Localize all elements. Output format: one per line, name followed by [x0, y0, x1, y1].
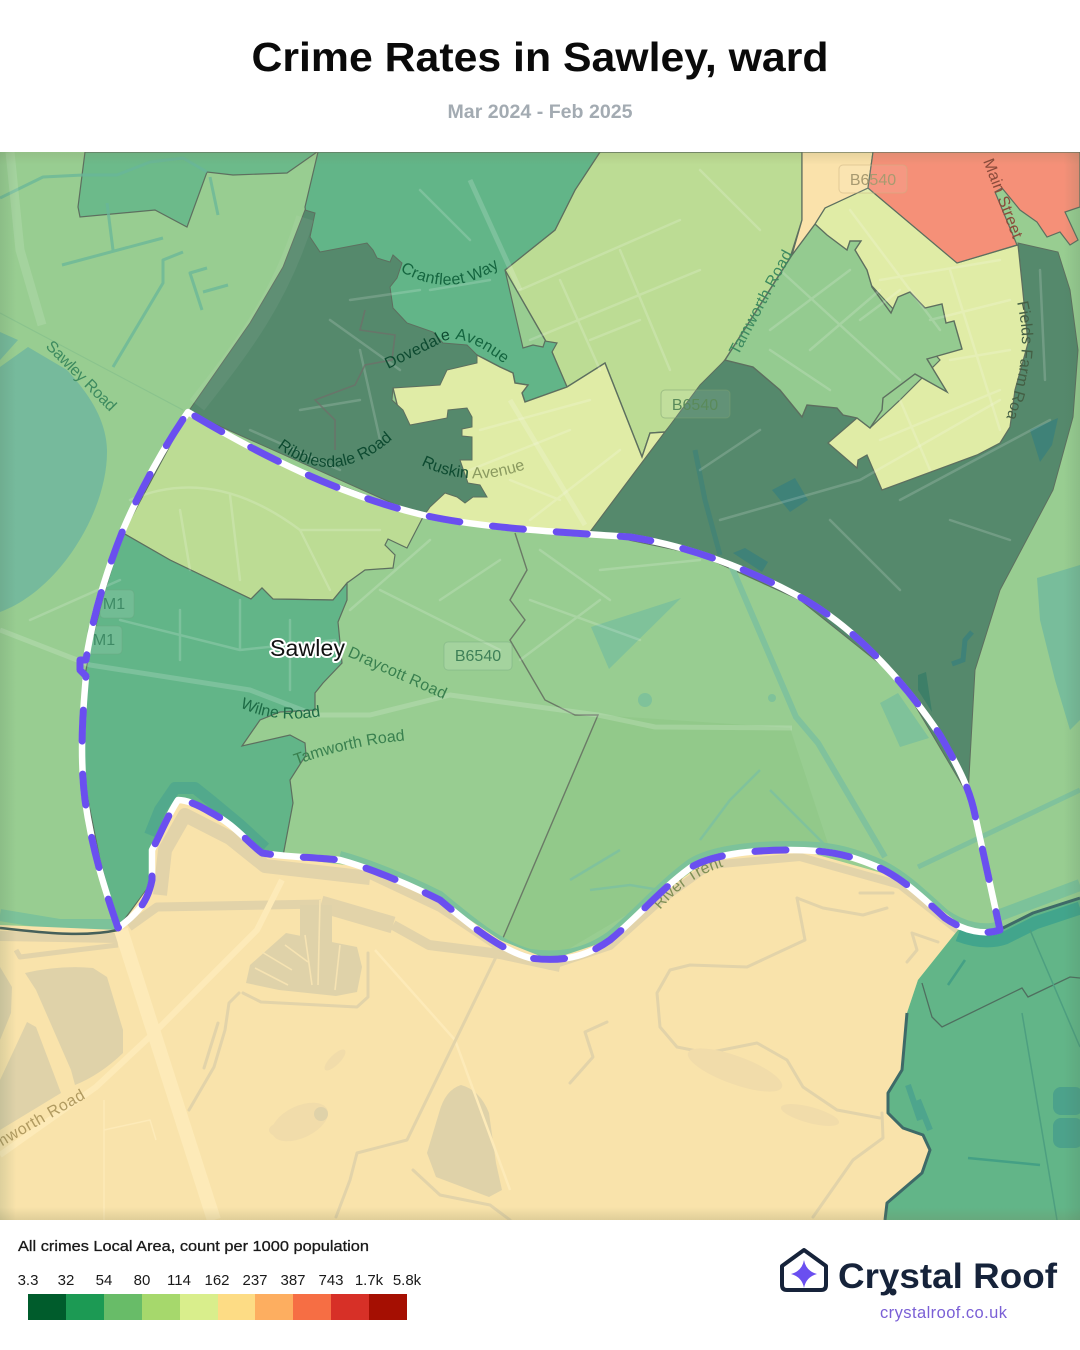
map area: south-east details: [908, 930, 1080, 1220]
legend colour scale: [28, 1294, 407, 1320]
map labels: motorway and road shields: B6540: [850, 172, 896, 189]
map labels: street names: Dovedale Avenue: [384, 329, 508, 368]
legend tick labels: [18, 1272, 422, 1289]
map labels: street names: Draycott Road: [345, 644, 449, 703]
legend tick labels: 80: [134, 1272, 150, 1289]
map area: small western pond: [0, 332, 18, 360]
legend tick labels: 32: [58, 1272, 74, 1289]
map labels: motorway and road shields: [88, 165, 907, 670]
icon: house with star: [782, 1250, 826, 1290]
map area: top sand zone: [792, 152, 873, 255]
map area: north-west darker patch: [78, 152, 317, 227]
map area: ward north-west yellow-green part: [123, 412, 423, 600]
legend: [18, 1238, 422, 1320]
ward boundary: [80, 412, 1000, 959]
map labels: street names: Tamworth Road: [727, 247, 796, 358]
map labels: street names: Main Street: [979, 156, 1025, 241]
legend tick labels: 3.3: [18, 1272, 38, 1289]
map area: marina pontoons: [255, 900, 340, 990]
map area: central pale zone: [393, 355, 665, 532]
legend tick labels: 54: [96, 1272, 112, 1289]
map labels: street names: Sawley Road: [42, 338, 119, 415]
map labels: street names: Tamworth Road: [292, 729, 404, 764]
map area: ward south-east shade: [500, 715, 830, 960]
legend tick labels: 387: [280, 1272, 306, 1289]
map area: faint wetlands on sand: [266, 1040, 841, 1149]
map labels: motorway and road shields: M1: [93, 632, 115, 649]
map area: north-west streams: [0, 158, 228, 367]
map area: eastern water patch: [1037, 565, 1080, 730]
legend tick labels: 743: [318, 1272, 344, 1289]
logo wordmark: Crystal Roof: [838, 1257, 1057, 1296]
map area: upper yellow-green zone: [505, 152, 802, 457]
map labels: street names: River Trent: [654, 860, 724, 909]
legend tick labels: 237: [242, 1272, 268, 1289]
map labels: motorway and road shields: B6540: [672, 397, 718, 414]
legend tick labels: 114: [167, 1272, 191, 1289]
map area: ward internal boundaries: [500, 533, 598, 945]
map area: ward ponds and playing field: [591, 598, 929, 747]
map area: south-east river band: [958, 908, 1080, 941]
map area: north medium green zone: [305, 152, 600, 402]
map area: western lake: [0, 347, 107, 612]
map area: top-right red zone: [868, 152, 1080, 263]
map labels: street names: Ruskin Avenue: [422, 456, 524, 478]
map area: sand-side roads: [0, 880, 510, 1220]
map area: river trace on sand: [0, 815, 960, 967]
map label: Sawley place name: Sawley: [270, 635, 346, 661]
map labels: street names: Ribblesdale Road: [278, 431, 392, 468]
map area: ward west medium green part: [84, 533, 347, 928]
map labels: street names: Cranfleet Way: [402, 260, 497, 285]
map area: sand-side lakes and marina: [0, 905, 502, 1197]
map area: western pale road: [10, 152, 42, 325]
map area: road network: [0, 170, 1050, 728]
map edge shading: [0, 152, 1080, 1220]
logo: Crystal Roof: [782, 1250, 1057, 1322]
map area: dark-zone water: [695, 418, 1058, 712]
legend tick labels: 1.7k: [355, 1272, 384, 1289]
map area: river bank on green: [0, 788, 1080, 954]
map area: stream on western dark zone: [315, 310, 395, 450]
map area: surrounding light green base: [0, 152, 1080, 1013]
title: Crime Rates in Sawley, ward: [252, 34, 828, 80]
map area: sand-side streams: [189, 893, 938, 1220]
panel: choropleth map: [0, 152, 1080, 1220]
map labels: motorway and road shields: M1: [103, 596, 125, 613]
map area: north-east pale zone: [815, 188, 1028, 490]
logo url: crystalroof.co.uk: [880, 1304, 1008, 1322]
legend title: All crimes Local Area, count per 1000 population: [18, 1238, 369, 1255]
map area: Ribblesdale dark green zone: [188, 210, 487, 517]
map area: north-east light green zone: [725, 224, 962, 428]
map labels: motorway and road shields: B6540: [455, 648, 501, 665]
legend tick labels: 162: [204, 1272, 230, 1289]
map area: canal and eastern link: [570, 563, 1080, 890]
map area: eastern dark green zone: [590, 243, 1078, 795]
legend tick labels: 5.8k: [393, 1272, 422, 1289]
map area: south-east shoreline: [885, 898, 1080, 1220]
date range subtitle: Mar 2024 - Feb 2025: [448, 102, 633, 123]
map area: dark shoreline: [0, 928, 118, 934]
map labels: street names: Wilne Road: [242, 697, 320, 719]
logo keyhole on y: [890, 1288, 896, 1296]
map area: south sand zone: [0, 800, 965, 1220]
map area: south-east medium green zone: [885, 898, 1080, 1220]
